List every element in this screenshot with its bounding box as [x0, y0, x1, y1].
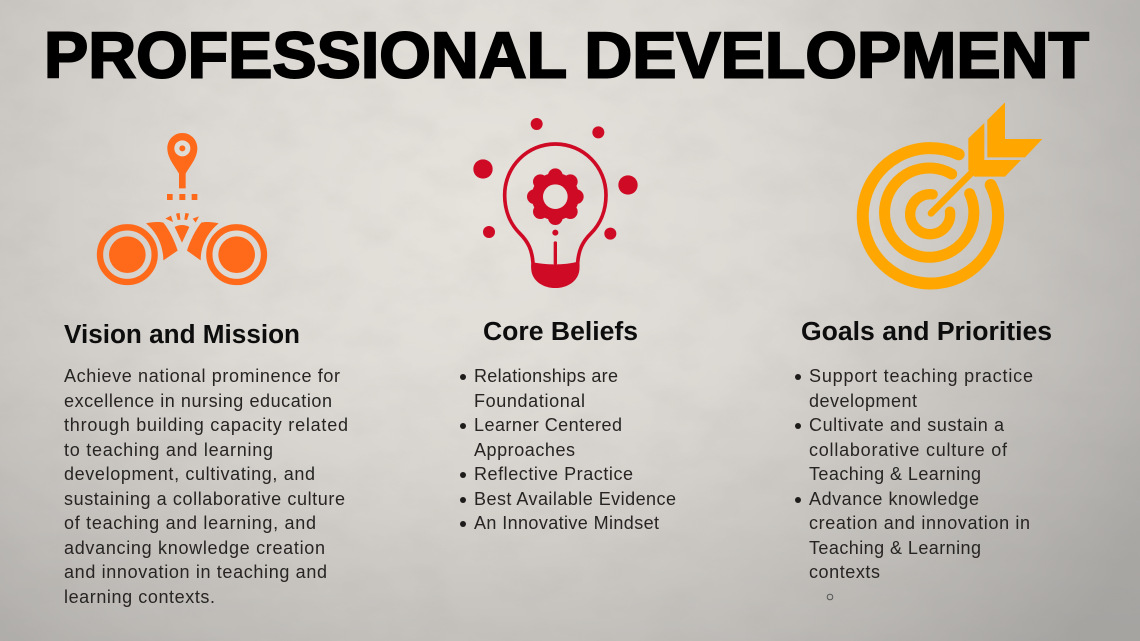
- text block: vision and mission: development, cultivating, and: [64, 464, 315, 484]
- list: core beliefs: Approaches: [474, 440, 575, 460]
- text block: vision and mission: Achieve national prominence for: [64, 366, 340, 386]
- text block: vision and mission: of teaching and learning, and: [64, 513, 316, 533]
- icon: binoculars with location pin: [100, 133, 264, 282]
- list: goals and priorities: Cultivate and sustain a: [809, 415, 1005, 435]
- title: PROFESSIONAL DEVELOPMENT: [44, 18, 1089, 92]
- list: core beliefs: An Innovative Mindset: [474, 513, 659, 533]
- list: core beliefs: Reflective Practice: [474, 464, 633, 484]
- text block: vision and mission: to teaching and learning: [64, 440, 273, 460]
- text block: vision and mission: through building capacity related: [64, 415, 348, 435]
- text block: vision and mission: [64, 366, 348, 607]
- icon: light bulb with gear: [473, 118, 638, 288]
- text block: vision and mission: learning contexts.: [64, 587, 215, 607]
- text block: vision and mission: and innovation in teaching and: [64, 562, 327, 582]
- text block: vision and mission: excellence in nursing education: [64, 391, 332, 411]
- text block: vision and mission: sustaining a collaborative culture: [64, 489, 345, 509]
- list: goals and priorities: Teaching & Learning: [809, 538, 981, 558]
- list: goals and priorities: [795, 366, 1033, 600]
- list: core beliefs: Learner Centered: [474, 415, 622, 435]
- heading: core beliefs: Core Beliefs: [483, 318, 638, 346]
- list: core beliefs: Best Available Evidence: [474, 489, 676, 509]
- panel: core beliefs: [460, 318, 676, 533]
- list: goals and priorities: Teaching & Learning: [809, 464, 981, 484]
- heading: vision and mission: Vision and Mission: [64, 321, 300, 349]
- list: goals and priorities: Support teaching practice: [809, 366, 1033, 386]
- text block: vision and mission: advancing knowledge creation: [64, 538, 325, 558]
- panel: vision and mission: [64, 321, 348, 607]
- list: goals and priorities: collaborative culture of: [809, 440, 1008, 460]
- list: core beliefs: Relationships are: [474, 366, 618, 386]
- list: core beliefs: [460, 366, 676, 533]
- panel: goals and priorities: [795, 318, 1052, 600]
- list: core beliefs: Foundational: [474, 391, 585, 411]
- icon: target with arrow: [863, 102, 1042, 283]
- list: goals and priorities: creation and innovation in: [809, 513, 1030, 533]
- list: goals and priorities: development: [809, 391, 917, 411]
- heading: goals and priorities: Goals and Priorities: [801, 318, 1052, 346]
- list: goals and priorities: contexts: [809, 562, 880, 582]
- list: goals and priorities: Advance knowledge: [809, 489, 979, 509]
